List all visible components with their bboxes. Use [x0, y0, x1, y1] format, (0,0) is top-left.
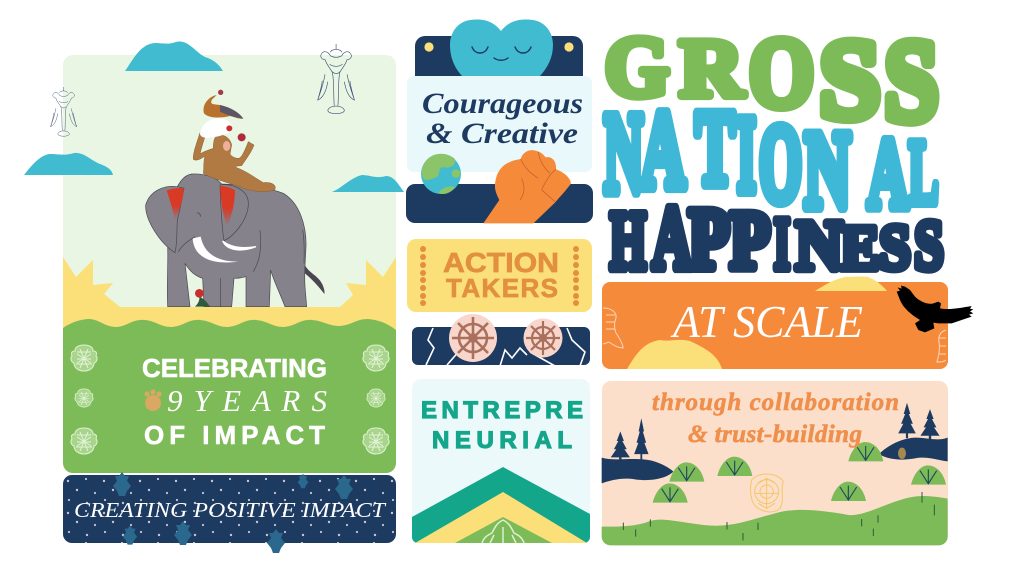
HAPPINESS: H — [610, 194, 646, 286]
cloud: top — [125, 42, 223, 71]
elephant tail — [303, 263, 325, 294]
navy top card — [415, 36, 583, 80]
panel: at scale — [602, 277, 948, 369]
light card — [407, 76, 592, 172]
navy hill right — [879, 438, 948, 461]
elephant tusks — [193, 237, 238, 262]
panel: courageous and creative — [406, 19, 593, 223]
icon: conch top right — [318, 44, 354, 114]
panel: dharma wheels — [412, 314, 590, 366]
icon: wheel small — [524, 318, 562, 358]
grass ticks — [623, 492, 934, 540]
red flower — [195, 289, 210, 307]
cloud: right — [332, 175, 404, 192]
icon: raised fist — [483, 150, 571, 223]
navy hill left — [602, 458, 673, 483]
panel background — [63, 55, 396, 473]
text — [443, 247, 559, 303]
GROSS: O — [749, 17, 814, 128]
HAPPINESS: P — [730, 195, 770, 287]
NATIONAL: N — [804, 110, 851, 231]
panel: through collaboration and trust-building — [602, 381, 948, 545]
HAPPINESS: S — [914, 205, 944, 285]
bead columns — [420, 246, 579, 306]
text: ACTION — [443, 247, 559, 278]
heading: celebrating 9 years of impact: 9 Y E A R S — [167, 383, 327, 418]
ornaments: green panel knots — [71, 345, 389, 454]
chevrons — [412, 467, 590, 543]
orange background — [602, 282, 948, 369]
HAPPINESS: S — [879, 213, 911, 284]
elephant right ear — [220, 185, 248, 241]
heading — [421, 397, 583, 454]
NATIONAL: I — [737, 95, 756, 215]
heading: NEURIAL — [432, 427, 572, 454]
illustration: elephant with monkey, rabbit and peacock — [146, 90, 325, 307]
elephant body — [167, 174, 307, 307]
rabbit — [200, 118, 232, 138]
icon: gold ornament — [144, 389, 162, 411]
NATIONAL — [604, 89, 939, 231]
icon: conch left — [51, 87, 77, 136]
trees — [611, 403, 940, 461]
NATIONAL: O — [759, 103, 802, 224]
GROSS: R — [679, 22, 745, 114]
green ground — [602, 496, 948, 545]
yellow hill bottom — [627, 340, 722, 369]
elephant left ear — [146, 186, 184, 253]
NATIONAL: A — [641, 89, 685, 211]
text: through collaboration — [652, 389, 899, 416]
icon: wheel large — [449, 314, 497, 362]
panel: entrepreneurial — [412, 379, 590, 543]
heading: celebrating 9 years of impact — [142, 353, 327, 450]
NATIONAL: T — [695, 90, 735, 207]
yellow hill top — [815, 277, 887, 291]
HAPPINESS: N — [796, 205, 842, 284]
HAPPINESS: A — [652, 189, 692, 288]
text: AT SCALE — [670, 296, 863, 347]
heading: celebrating 9 years of impact: OF IMPACT — [144, 420, 325, 450]
icon: smiling heart — [450, 19, 553, 78]
yellow dots — [424, 42, 574, 52]
HAPPINESS: E — [840, 213, 880, 284]
panel: elephant scene — [63, 55, 396, 473]
text — [652, 389, 899, 448]
yellow sunburst ground — [63, 257, 396, 340]
text: & trust-building — [688, 421, 862, 448]
text: CREATING POSITIVE IMPACT — [74, 498, 387, 522]
heading: celebrating 9 years of impact: CELEBRATING — [142, 353, 327, 383]
green wavy panel — [63, 319, 396, 473]
HAPPINESS — [610, 189, 944, 288]
red blossom in hand — [238, 133, 246, 141]
panel: action takers — [407, 239, 592, 312]
script text — [422, 87, 583, 150]
shrine ornaments — [113, 472, 353, 553]
HAPPINESS: P — [689, 190, 729, 287]
GROSS: S — [884, 17, 939, 146]
navy bar — [406, 184, 593, 223]
NATIONAL: L — [908, 121, 939, 223]
title: Gross National Happiness — [604, 17, 944, 288]
NATIONAL: A — [867, 117, 909, 229]
flower ornament — [751, 474, 783, 512]
GROSS — [605, 17, 939, 146]
elephant eye and trunk lines — [178, 213, 304, 307]
bushes — [653, 442, 946, 503]
monkey — [193, 133, 275, 192]
text: TAKERS — [446, 273, 558, 303]
cracks — [426, 328, 585, 366]
gold ornament — [898, 448, 906, 459]
script text: & Creative — [426, 117, 578, 150]
ornaments — [603, 308, 946, 362]
GROSS: S — [819, 18, 881, 143]
GROSS: G — [605, 21, 669, 115]
icon: globe — [421, 154, 461, 194]
HAPPINESS: I — [774, 204, 790, 286]
peacock — [204, 95, 243, 119]
panel: creating positive impact — [63, 472, 396, 553]
script text: Courageous — [422, 87, 583, 120]
icon: eagle — [897, 286, 973, 332]
cloud: left — [24, 153, 113, 175]
NATIONAL: N — [604, 91, 643, 217]
heading: ENTREPRE — [421, 397, 583, 424]
